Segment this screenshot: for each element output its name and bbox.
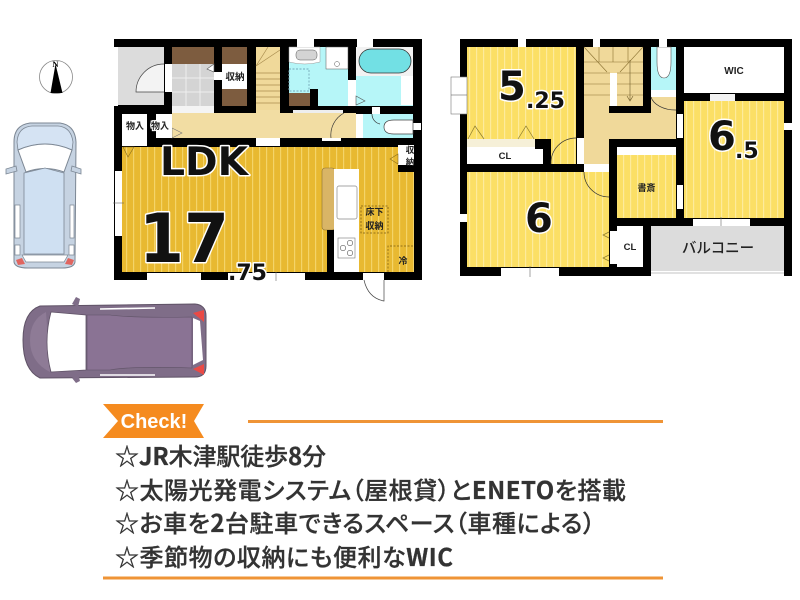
floor plan: second floor [451,39,792,277]
check badge [103,404,204,438]
stairs and upper hall [584,47,676,172]
windows and door: first floor [113,171,384,301]
underfloor storage: 床下 [365,207,384,217]
windows: second floor [451,39,667,114]
study room [617,147,683,218]
room size fraction: .75: .75 [228,261,267,286]
compass: north arrow [40,59,72,94]
underfloor storage [361,206,388,233]
storage room [214,47,247,106]
feature: station access: ☆JR木津駅徒歩8分 [115,437,326,472]
closet: bedroom 6: CL [624,242,637,253]
LDK small storage: 収 [406,145,415,155]
WIC [684,47,784,101]
LDK small storage [390,145,415,172]
refrigerator space: 冷 [398,255,408,266]
room size: 17 tatami: 17 [139,200,229,279]
check badge: Check! [121,411,187,433]
refrigerator space [388,246,414,272]
study room: 書斎 [637,182,656,193]
storage closets [122,114,172,146]
WIC: WIC [724,66,744,77]
bedroom 5.25: CL [499,151,512,162]
feature: solar power: ☆太陽光発電システム（屋根貸）とENETOを搭載 [115,471,626,506]
car: purple, parked horizontally [23,297,206,383]
washroom [289,39,373,113]
room size fraction: .5: .5 [735,139,759,164]
walls: second floor [460,39,792,276]
room label: LDK: LDK [160,140,250,185]
feature: parking: ☆お車を2台駐車できるスペース（車種による） [115,504,595,539]
closet: bedroom 6 [610,226,643,267]
kitchen counter [322,168,359,272]
floor plan: first floor [113,39,422,301]
underfloor storage: 収納 [365,220,384,231]
room size: 5.25 tatami: 5 [498,64,526,110]
room size: 6 tatami: 6 [525,196,553,242]
storage closets: 物入 [151,120,169,131]
porch [114,47,164,106]
stairs [256,47,280,110]
feature list [115,437,626,573]
entrance hall and shoe storage [165,47,214,113]
balcony: バルコニー [682,237,754,258]
car: blue, parked vertically [6,123,81,268]
bedroom 6.5 [677,101,792,228]
bathroom [348,47,413,106]
compass: north arrow: N [52,59,59,69]
room size: 6.5 tatami: 6 [708,114,736,160]
toilet [356,107,421,138]
bedroom 6 [460,172,609,277]
toilet: second floor [651,47,676,113]
LDK room [122,145,415,272]
LDK small storage: 納 [406,157,415,167]
storage closets: 物入 [126,120,144,131]
balcony [651,226,784,276]
bedroom 5.25 [467,47,584,164]
room size fraction: .25: .25 [526,89,565,114]
storage room: 収納 [225,71,245,83]
hallway [172,110,356,146]
feature: storage: ☆季節物の収納にも便利なWIC [115,538,453,573]
walls: first floor [114,39,422,280]
